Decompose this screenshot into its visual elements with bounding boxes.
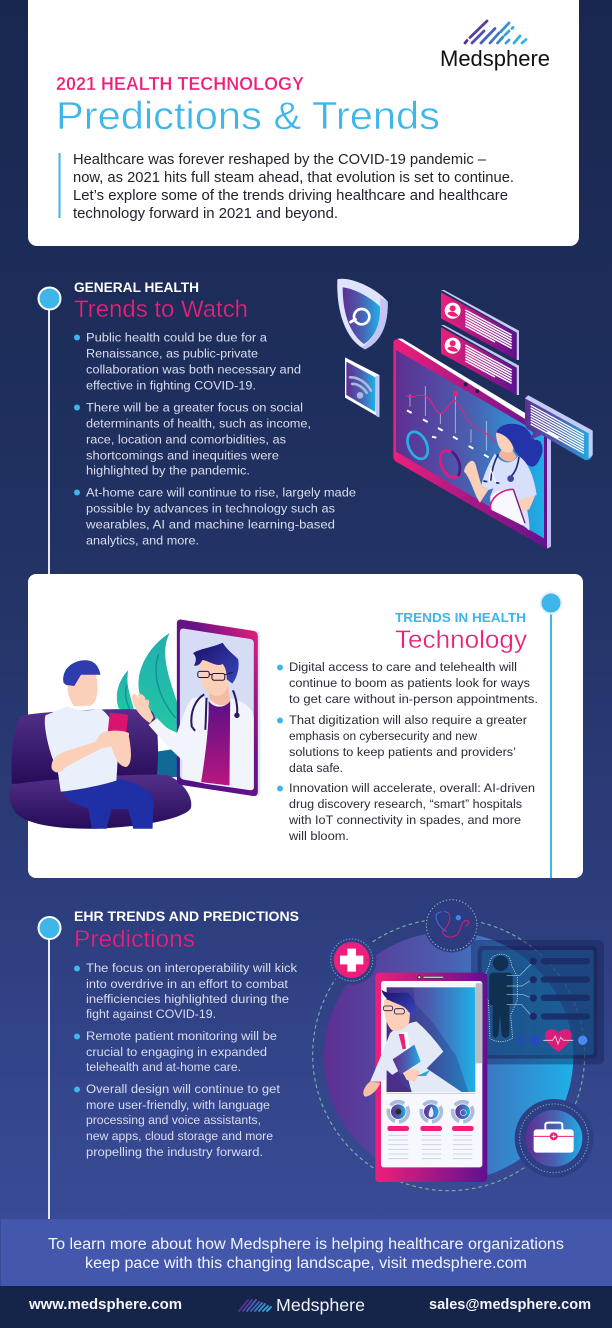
donut charts: [403, 429, 465, 481]
speech bubble: [525, 395, 593, 460]
bullet list: inefficiencies highlighted during the: [86, 992, 289, 1006]
email: sales@medsphere.com: [429, 1297, 591, 1313]
bullet list: Overall design will continue to get: [86, 1082, 281, 1096]
bullet list: [277, 660, 538, 843]
pink labels: [387, 1126, 474, 1131]
plant: [117, 633, 179, 777]
intro text: now, as 2021 hits full steam ahead, that evolution is set to continue.: [73, 170, 514, 186]
timeline marker: [540, 592, 562, 878]
badge: medical plus: [327, 935, 376, 985]
bullet list: That digitization will also require a greater: [289, 713, 527, 727]
bullet list: collaboration was both necessary and: [86, 362, 301, 376]
call to action banner: [1, 1219, 612, 1286]
heading: Trends to Watch: Trends to Watch: [74, 296, 248, 323]
bullet list: solutions to keep patients and providers’: [289, 745, 516, 759]
call to action banner: To learn more about how Medsphere is helping healthcare organizations: [48, 1236, 564, 1253]
heading: EHR Trends and Predictions: EHR TRENDS AND PREDICTIONS: [74, 909, 299, 924]
bullet list: telehealth and at-home care.: [86, 1060, 241, 1074]
bullet list: new apps, cloud storage and more: [86, 1129, 273, 1143]
intro accent bar: [58, 153, 60, 218]
footer logo: Medsphere: [276, 1295, 365, 1315]
sofa: [9, 709, 191, 829]
bullet list: At-home care will continue to rise, largely made: [86, 486, 356, 500]
title: Predictions & Trends: Predictions & Trends: [56, 95, 440, 138]
call to action banner: keep pace with this changing landscape, visit medsphere.com: [85, 1255, 527, 1272]
bullet list: highlighted by the pandemic.: [86, 464, 250, 478]
body scan panel: [471, 940, 604, 1064]
bullet list: Public health could be due for a: [86, 330, 267, 344]
panel: trends in health technology: [9, 574, 583, 878]
intro text: [73, 152, 514, 222]
illustration: doctor on phone with health icons: [313, 898, 604, 1191]
profile card 1: [441, 290, 519, 360]
heading: Predictions: Predictions: [74, 926, 195, 953]
title: 2021 Health Technology: 2021 HEALTH TECHNOLOGY: [56, 74, 304, 94]
bullet list: shortcomings and inequities were: [86, 448, 279, 462]
bullet list: race, location and comorbidities, as: [86, 432, 286, 446]
line chart: [406, 386, 496, 457]
badge: stethoscope: [424, 898, 479, 952]
text lines: [388, 1135, 472, 1159]
bullet list: continue to boom as patients look for ways: [289, 676, 530, 690]
nurse: [464, 424, 543, 531]
heading: Trends in Health: TRENDS IN HEALTH: [395, 610, 526, 625]
logo: Medsphere: [440, 21, 550, 71]
icon: shield: [337, 279, 388, 349]
bullet list: [74, 961, 298, 1159]
bullet list: processing and voice assistants,: [86, 1113, 261, 1127]
bullet list: fight against COVID-19.: [86, 1007, 216, 1021]
bullet list: effective in fighting COVID-19.: [86, 378, 256, 392]
bullet list: [74, 330, 356, 548]
bullet list: to get care without in-person appointments.: [289, 692, 538, 706]
footer: [0, 1286, 612, 1328]
bullet list: There will be a greater focus on social: [86, 400, 303, 414]
illustration: patient on sofa with doctor on tablet: [9, 619, 261, 829]
bullet list: more user-friendly, with language: [86, 1098, 270, 1112]
bullet list: Remote patient monitoring will be: [86, 1029, 277, 1043]
bullet list: emphasis on cybersecurity and new: [289, 729, 477, 743]
bullet list: with IoT connectivity in spades, and more: [288, 813, 521, 827]
section: general health: [38, 279, 593, 574]
website: www.medsphere.com: [28, 1297, 182, 1313]
intro text: technology forward in 2021 and beyond.: [73, 206, 338, 222]
patient: [45, 660, 154, 829]
bullet list: into overdrive in an effort to combat: [86, 977, 289, 991]
bullet list: analytics, and more.: [86, 534, 199, 548]
bullet list: drug discovery research, “smart” hospitals: [289, 797, 522, 811]
section: EHR trends and predictions: [38, 898, 604, 1219]
tablet with doctor: [132, 619, 261, 797]
intro text: Healthcare was forever reshaped by the COVID-19 pandemic –: [73, 152, 487, 168]
illustration: nurse on tablet: [337, 279, 593, 549]
icon: wifi tablet: [345, 357, 379, 417]
footer logo: [239, 1295, 365, 1315]
large gradient circle: [324, 932, 573, 1181]
bullet list: Renaissance, as public-private: [86, 346, 258, 360]
bullet list: wearables, AI and machine learning-based: [85, 518, 335, 532]
bullet list: data safe.: [289, 761, 343, 775]
doctor: [132, 643, 254, 790]
badge: medical kit: [515, 1099, 593, 1178]
bullet list: will bloom.: [288, 829, 349, 843]
dashed orbit: [313, 919, 585, 1191]
bullet list: possible by advances in technology such as: [86, 502, 335, 516]
timeline marker: [38, 917, 60, 1219]
indicator icons: [388, 1102, 473, 1122]
logo: Medsphere: Medsphere: [440, 46, 550, 71]
header panel: [28, 0, 579, 246]
bullet list: The focus on interoperability will kick: [86, 961, 298, 975]
profile card 2: [441, 325, 519, 395]
tablet frame: [393, 339, 551, 549]
bullet list: crucial to engaging in expanded: [86, 1045, 267, 1059]
bullet list: Digital access to care and telehealth will: [289, 660, 517, 674]
heading: General Health: GENERAL HEALTH: [74, 280, 199, 295]
doctor: [363, 989, 462, 1097]
bullet list: Innovation will accelerate, overall: AI-driven: [289, 781, 535, 795]
timeline marker: [38, 288, 60, 574]
heading: Technology: Technology: [395, 626, 528, 654]
phone: [363, 973, 487, 1182]
bullet list: determinants of health, such as income,: [86, 416, 311, 430]
bullet list: propelling the industry forward.: [86, 1145, 263, 1159]
intro text: Let’s explore some of the trends driving healthcare and healthcare: [73, 188, 508, 204]
